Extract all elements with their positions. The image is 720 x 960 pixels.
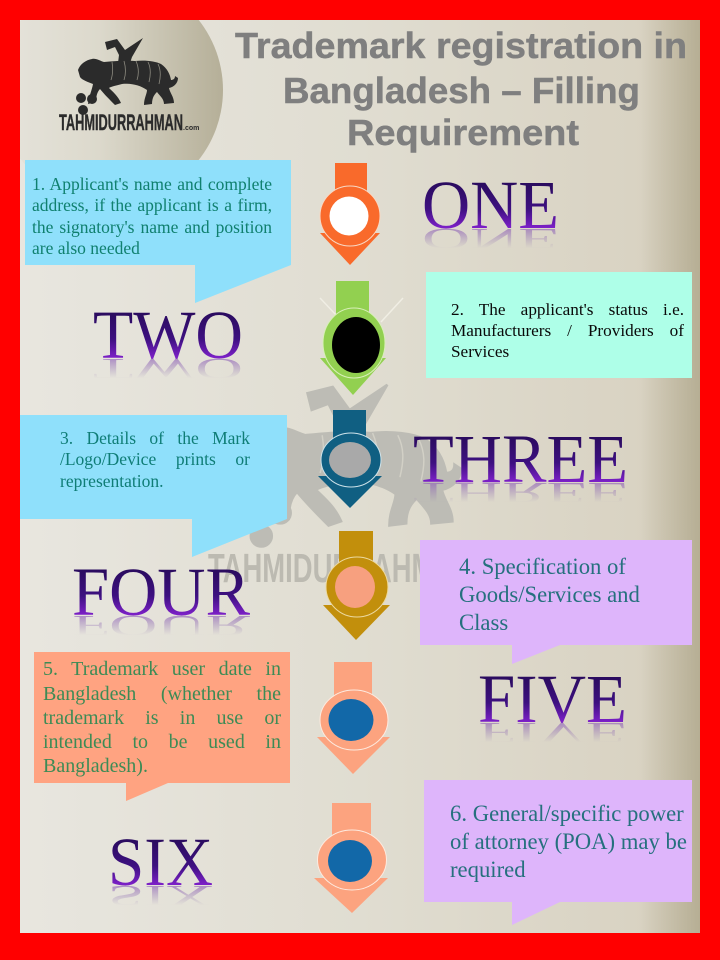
word: THREE: THREE [413, 476, 628, 509]
callout 2: applicant status: Services [451, 342, 509, 361]
callout 1: applicant name: the signatory's name and position [32, 217, 272, 237]
callout 5: user date: Bangladesh). [43, 754, 148, 776]
callout 1: applicant name: 1. Applicant's name and complete [32, 174, 272, 194]
callout 2: applicant status: Manufacturers / Providers of [451, 321, 684, 340]
arrow 1: orange [320, 163, 380, 265]
title: Requirement [347, 112, 579, 153]
watermark text: TAHMIDURRAHMAN [208, 545, 474, 591]
callout 1: applicant name [25, 160, 291, 303]
callout 4: specification: 4. Specification of [459, 554, 626, 579]
word: FIVE: FIVE [478, 716, 627, 749]
callout 5: user date [34, 652, 290, 801]
callout 6: power of attorney [424, 780, 692, 925]
watermark tiger [247, 385, 461, 546]
word: TWO: TWO [93, 352, 243, 385]
word: FOUR: FOUR [72, 609, 251, 642]
arrow 5: salmon [317, 662, 390, 774]
callout 4: specification: Goods/Services and [459, 582, 640, 607]
callout 3: mark details: /Logo/Device prints or [60, 449, 250, 469]
callout 6: power of attorney: 6. General/specific power [450, 801, 684, 826]
logo domain suffix: .com [183, 125, 199, 132]
word: FIVE: FIVE [478, 661, 627, 737]
callout 2: applicant status: 2. The applicant's status i.e. [451, 300, 684, 319]
arrow 3: teal [318, 410, 382, 508]
callout 6: power of attorney: of attorney (POA) may be [450, 829, 687, 854]
logo wordmark: TAHMIDURRAHMAN [59, 110, 183, 135]
callout 5: user date: trademark is in use or [43, 706, 281, 728]
callout 3: mark details: 3. Details of the Mark [60, 428, 250, 448]
logo: tiger and rider [76, 38, 178, 115]
callout 5: user date: 5. Trademark user date in [43, 658, 281, 680]
callout 6: power of attorney: required [450, 856, 526, 882]
callout 2: applicant status [426, 272, 692, 378]
word: THREE: THREE [413, 421, 628, 497]
callout 5: user date: Bangladesh (whether the [43, 682, 281, 704]
callout 4: specification: Class [459, 610, 508, 635]
callout 1: applicant name: address, if the applicant is a firm, [32, 195, 272, 215]
title: Bangladesh – Filling [283, 70, 640, 111]
title: Trademark registration in [235, 25, 687, 66]
arrow 4: gold [323, 531, 390, 640]
panel: darker right edge band [640, 20, 700, 933]
word: SIX: SIX [108, 879, 213, 912]
callout 3: mark details: representation. [60, 471, 164, 491]
word: ONE: ONE [422, 167, 559, 243]
arrow 2: green [320, 281, 403, 395]
word: SIX: SIX [108, 824, 213, 900]
arrow 6: salmon [314, 803, 388, 913]
callout 4: specification [420, 540, 692, 664]
callout 5: user date: intended to be used in [43, 730, 281, 752]
callout 3: mark details [20, 415, 287, 557]
logo disc [32, 20, 223, 160]
title [235, 25, 687, 153]
callout 1: applicant name: are also needed [32, 238, 140, 258]
word: TWO: TWO [93, 297, 243, 373]
word: FOUR: FOUR [72, 554, 250, 630]
word: ONE: ONE [422, 222, 559, 255]
